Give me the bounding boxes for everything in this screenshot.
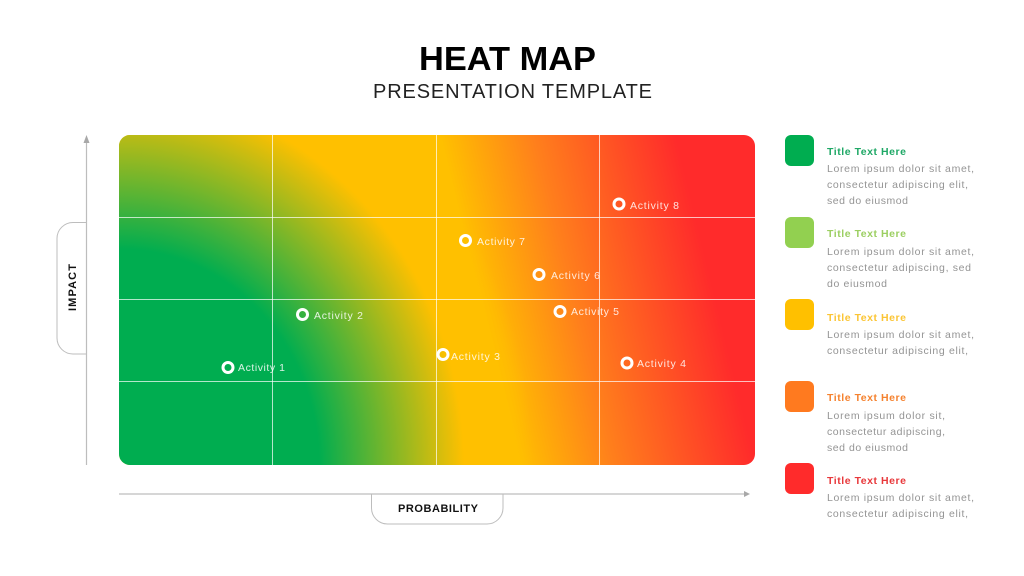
impact axis arrow: [84, 135, 90, 465]
legend item: yellow: [785, 299, 974, 357]
legend item: light green: do eiusmod: [827, 278, 887, 290]
legend item: green: consectetur adipiscing elit,: [827, 179, 968, 191]
legend item: light green: Lorem ipsum dolor sit amet,: [827, 246, 974, 258]
activity 8: [614, 199, 679, 212]
probability axis label tab: [372, 494, 503, 524]
legend item: green: [785, 135, 974, 207]
impact axis label tab: IMPACT: [67, 264, 79, 311]
activity 7: Activity 7: [477, 236, 525, 248]
legend item: light green: [785, 217, 974, 290]
legend item: red: [785, 463, 974, 520]
heat map chart: [119, 135, 755, 465]
legend item: orange: consectetur adipiscing,: [827, 426, 945, 438]
legend item: green: Lorem ipsum dolor sit amet,: [827, 163, 974, 175]
legend item: red: consectetur adipiscing elit,: [827, 508, 968, 520]
legend item: green: Title Text Here: [827, 146, 906, 158]
title: HEAT MAP: [419, 40, 596, 77]
legend item: green: sed do eiusmod: [827, 195, 908, 207]
activity 3: Activity 3: [451, 351, 500, 363]
activity 2: Activity 2: [314, 310, 363, 322]
subtitle: PRESENTATION TEMPLATE: [373, 81, 652, 103]
legend item: orange: [785, 381, 945, 454]
legend item: orange: Lorem ipsum dolor sit,: [827, 410, 945, 422]
legend item: red: Lorem ipsum dolor sit amet,: [827, 492, 974, 504]
legend item: red: Title Text Here: [827, 475, 906, 487]
legend item: yellow: Title Text Here: [827, 312, 906, 324]
legend item: light green: Title Text Here: [827, 228, 906, 240]
activity 4: Activity 4: [637, 358, 686, 370]
heat gradient field: [119, 135, 755, 465]
legend item: orange: Title Text Here: [827, 392, 906, 404]
activity 6: Activity 6: [551, 270, 600, 282]
probability axis arrow: [119, 491, 750, 497]
legend item: orange: sed do eiusmod: [827, 442, 908, 454]
probability axis label tab: PROBABILITY: [398, 503, 479, 515]
legend item: light green: consectetur adipiscing, sed: [827, 262, 971, 274]
impact axis label tab: [57, 222, 86, 354]
legend item: yellow: consectetur adipiscing elit,: [827, 345, 968, 357]
legend item: yellow: Lorem ipsum dolor sit amet,: [827, 329, 974, 341]
activity 8: Activity 8: [630, 200, 679, 212]
activity 1: Activity 1: [238, 362, 285, 374]
activity 5: Activity 5: [571, 306, 619, 318]
